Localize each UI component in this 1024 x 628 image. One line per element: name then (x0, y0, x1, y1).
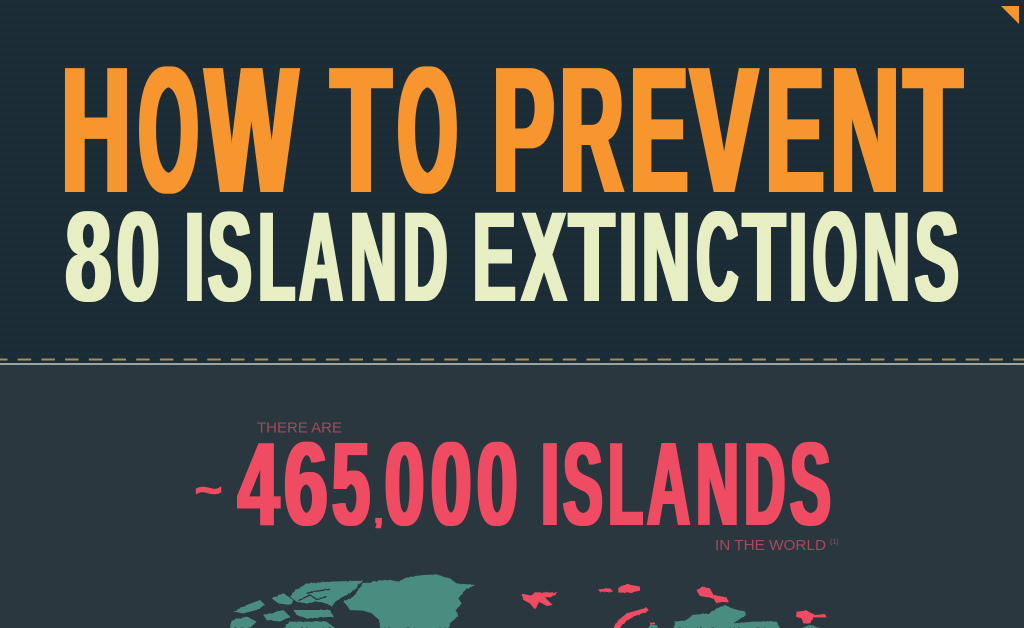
subtitle: 80 island extinctions: O (813, 186, 857, 329)
map: north america and greenland (230, 574, 475, 628)
headline: 465,000 islands: , (376, 493, 381, 531)
subtitle: 80 island extinctions: X (522, 186, 566, 329)
title: how to prevent: T (331, 30, 391, 231)
dashed divider (0, 358, 1024, 360)
subtitle: 80 island extinctions: E (473, 186, 516, 329)
subtitle: 80 island extinctions: N (863, 186, 910, 329)
subtitle: 80 island extinctions: A (299, 186, 343, 329)
title: how to prevent: O (139, 30, 198, 231)
panel: header background (0, 0, 1024, 364)
headline: 465,000 islands: 6 (284, 418, 328, 551)
footnote marker: (1) (830, 539, 839, 546)
label: in the world: IN THE WORLD (715, 537, 826, 554)
subtitle: 80 island extinctions: C (697, 186, 738, 329)
subtitle: 80 island extinctions: T (569, 186, 614, 329)
headline: 465,000 islands: 4 (238, 418, 279, 551)
title: how to prevent: P (493, 30, 554, 231)
subtitle: 80 island extinctions: I (184, 186, 205, 329)
panel: lower background (0, 364, 1024, 628)
headline: 465,000 islands: N (696, 418, 739, 551)
subtitle: 80 island extinctions: S (915, 186, 959, 329)
subtitle: 80 island extinctions: S (208, 186, 252, 329)
headline: 465,000 islands: A (647, 418, 690, 551)
subtitle: 80 island extinctions: D (403, 186, 447, 329)
headline: 465,000 islands: I (541, 418, 559, 551)
headline: 465,000 islands: L (608, 418, 643, 551)
title: how to prevent: R (560, 30, 623, 231)
title: how to prevent: O (398, 30, 457, 231)
title: how to prevent: H (62, 30, 130, 231)
headline: 465,000 islands: D (744, 418, 785, 551)
divider line (0, 363, 1024, 365)
subtitle: 80 island extinctions: T (743, 186, 785, 329)
headline: 465,000 islands: 0 (385, 418, 424, 551)
headline: 465,000 islands: 5 (332, 418, 370, 551)
headline: 465,000 islands: 0 (431, 418, 472, 551)
map: russia mainland (648, 605, 820, 628)
tilde: ~ (195, 470, 222, 512)
title: how to prevent: V (690, 30, 758, 231)
subtitle: 80 island extinctions: 0 (116, 186, 160, 329)
headline: 465,000 islands: S (563, 418, 602, 551)
title: how to prevent: W (206, 30, 297, 231)
headline: 465,000 islands: 0 (477, 418, 518, 551)
subtitle: 80 island extinctions: 8 (65, 186, 112, 329)
subtitle: 80 island extinctions: I (619, 186, 637, 329)
title: how to prevent: E (766, 30, 824, 231)
title: how to prevent: E (630, 30, 688, 231)
subtitle: 80 island extinctions: N (642, 186, 690, 329)
icon: corner triangle (1001, 6, 1019, 24)
title: how to prevent: T (904, 30, 962, 231)
label: there are: THERE ARE (257, 420, 342, 436)
subtitle: 80 island extinctions: I (789, 186, 807, 329)
subtitle: 80 island extinctions: L (258, 186, 295, 329)
headline: 465,000 islands: S (790, 418, 831, 551)
title: how to prevent: N (831, 30, 899, 231)
subtitle: 80 island extinctions: N (350, 186, 397, 329)
map: highlighted arctic islands (522, 584, 827, 628)
